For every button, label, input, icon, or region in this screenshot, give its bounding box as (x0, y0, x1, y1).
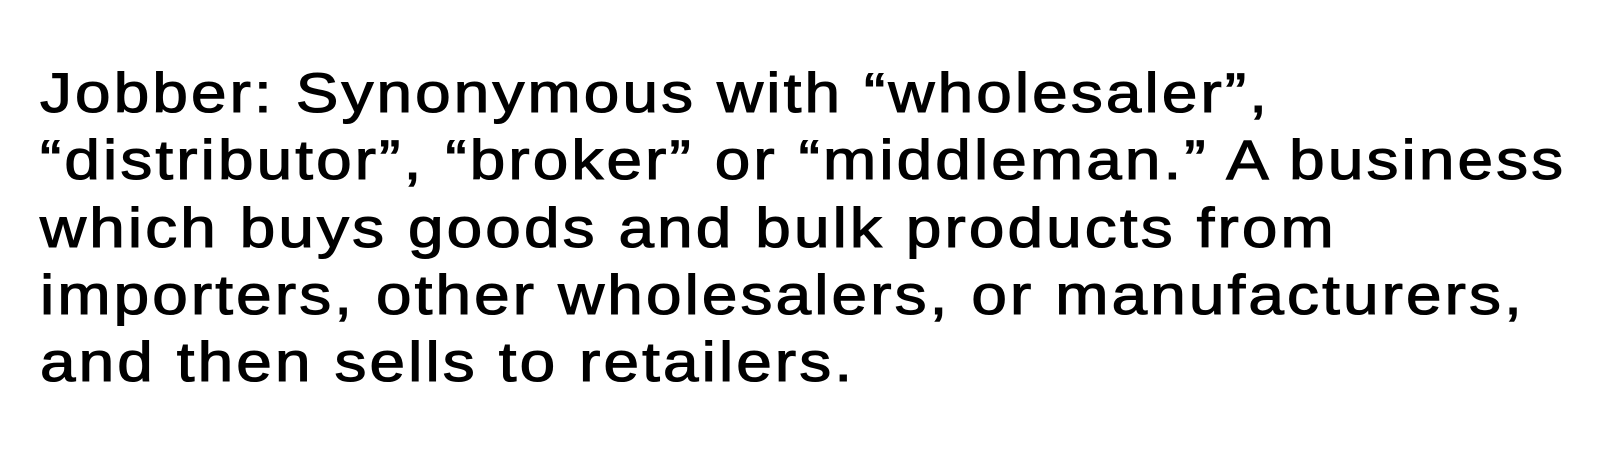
text block: jobber definition: which buys goods and bulk products from (40, 196, 1337, 259)
text block: jobber definition: “distributor”, “broker” or “middleman.” A business (40, 128, 1566, 191)
text block: jobber definition (39, 61, 1566, 393)
text block: jobber definition: importers, other wholesalers, or manufacturers, (40, 263, 1525, 326)
text block: jobber definition: and then sells to retailers. (40, 330, 855, 393)
text block: jobber definition: Jobber: Synonymous with “wholesaler”, (40, 61, 1270, 124)
